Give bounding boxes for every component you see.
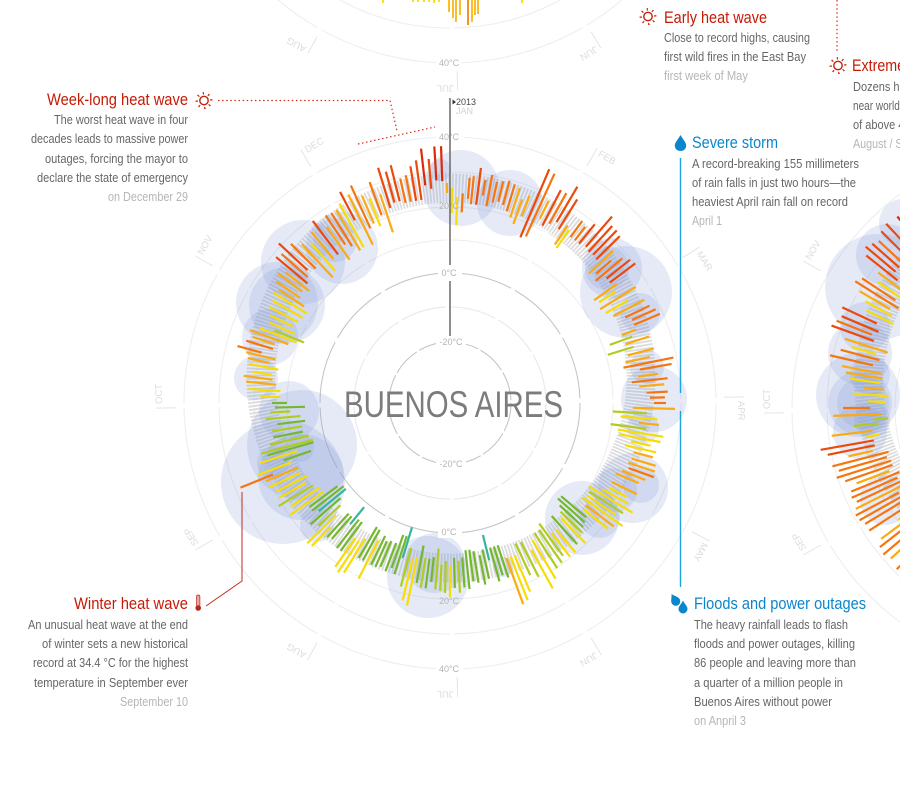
callout: extreme heat wave <box>830 56 900 151</box>
body text <box>853 80 900 151</box>
rings and months: NOV <box>804 238 824 262</box>
body text: of winter sets a new historical <box>42 637 188 651</box>
body text: A record-breaking 155 millimeters <box>692 157 859 171</box>
rings and months: SEP <box>790 531 809 553</box>
connector: winter heat wave line <box>206 492 242 606</box>
top city chart fragment: AUG <box>285 34 308 54</box>
connector: extreme heat wave dotted leader <box>836 0 838 52</box>
callout: severe storm <box>675 133 859 228</box>
body text: outages, forcing the mayor to <box>45 152 188 166</box>
body text <box>692 157 859 228</box>
icon: two water drops <box>668 592 688 614</box>
right city chart fragment <box>762 142 900 674</box>
temperature scale labels: 20°C <box>439 201 460 211</box>
icon: water drop <box>675 135 686 151</box>
icon: sun <box>830 57 846 74</box>
body text: first week of May <box>664 69 749 83</box>
month ticks and labels: MAY <box>690 540 709 564</box>
body text: record at 34.4 °C for the highest <box>33 656 188 670</box>
body text: on December 29 <box>108 190 188 204</box>
body text: Buenos Aires without power <box>694 695 832 709</box>
month ticks and labels: SEP <box>182 526 201 548</box>
heading: Early heat wave <box>664 8 767 27</box>
body text <box>694 618 856 728</box>
body text: declare the state of emergency <box>37 171 189 185</box>
body text <box>664 31 810 83</box>
icon: sun <box>196 92 212 109</box>
body text <box>31 113 189 204</box>
connector: storm timeline <box>680 158 682 587</box>
heading: Winter heat wave <box>74 594 188 613</box>
city title: BUENOS AIRES <box>344 384 563 425</box>
temperature scale labels: 20°C <box>439 596 460 606</box>
callout: winter heat wave <box>28 594 201 709</box>
month ticks and labels: DEC <box>303 136 326 155</box>
rings and months: OCT <box>762 389 773 409</box>
month ticks and labels: FEB <box>596 149 617 167</box>
body text: first wild fires in the East Bay <box>664 50 807 64</box>
year axis marker: 2013 <box>456 97 476 107</box>
precipitation circles <box>816 199 900 525</box>
callout: floods and power outages <box>668 592 866 728</box>
body text: The heavy rainfall leads to flash <box>694 618 848 632</box>
body text: temperature in September ever <box>34 676 188 690</box>
top city chart fragment: JUN <box>577 43 599 62</box>
normal temperature band <box>261 188 641 568</box>
callout: week-long heat wave <box>31 90 212 204</box>
month ticks and labels: NOV <box>196 233 216 257</box>
icon: thermometer <box>195 595 201 611</box>
body text <box>28 618 188 709</box>
body text: April 1 <box>692 214 722 228</box>
month ticks and labels: JUL <box>437 688 454 699</box>
temperature scale labels: 0°C <box>441 268 457 278</box>
heading: Severe storm <box>692 133 778 152</box>
year axis marker: JAN <box>456 106 473 116</box>
body text: heaviest April rain fall on record <box>692 195 848 209</box>
body text: 86 people and leaving more than <box>694 656 856 670</box>
body text: floods and power outages, killing <box>694 637 855 651</box>
temperature rings <box>184 137 716 669</box>
normal band <box>869 193 900 573</box>
body text: The worst heat wave in four <box>54 113 188 127</box>
connector: week-long heat wave dotted leader <box>218 100 435 144</box>
rings and months <box>762 142 900 674</box>
callout: early heat wave <box>640 8 810 83</box>
month ticks and labels: AUG <box>285 640 308 660</box>
body text: of rain falls in just two hours—the <box>692 176 856 190</box>
main chart: Buenos Aires radial temperature <box>154 97 746 699</box>
temperature scale labels <box>436 131 466 675</box>
precipitation circles <box>221 150 687 618</box>
body text: on Anpril 3 <box>694 714 746 728</box>
year axis marker <box>450 97 476 336</box>
icon: sun <box>640 8 656 25</box>
temperature scale labels: -20°C <box>439 459 463 469</box>
body text: Close to record highs, causing <box>664 31 810 45</box>
temperature scale labels: 40°C <box>439 132 460 142</box>
top city chart fragment: 40°C <box>439 58 460 68</box>
body text: decades leads to massive power <box>31 132 188 146</box>
temperature scale labels: -20°C <box>439 337 463 347</box>
month ticks and labels: OCT <box>154 384 165 404</box>
body text: September 10 <box>120 695 188 709</box>
heading: Week-long heat wave <box>47 90 188 109</box>
body text: a quarter of a million people in <box>694 676 843 690</box>
month ticks and labels <box>154 136 746 699</box>
month ticks and labels: MAR <box>694 250 714 273</box>
heading: Floods and power outages <box>694 594 866 613</box>
daily temperature bars <box>821 216 900 569</box>
month ticks and labels: APR <box>735 401 746 421</box>
temperature scale labels: 40°C <box>439 664 460 674</box>
month ticks and labels: JUN <box>577 649 599 668</box>
top city chart fragment <box>184 0 716 93</box>
temperature scale labels: 0°C <box>441 527 457 537</box>
daily temperature bars <box>237 146 675 605</box>
body text: An unusual heat wave at the end <box>28 618 188 632</box>
top city chart fragment: JUL <box>437 82 454 93</box>
